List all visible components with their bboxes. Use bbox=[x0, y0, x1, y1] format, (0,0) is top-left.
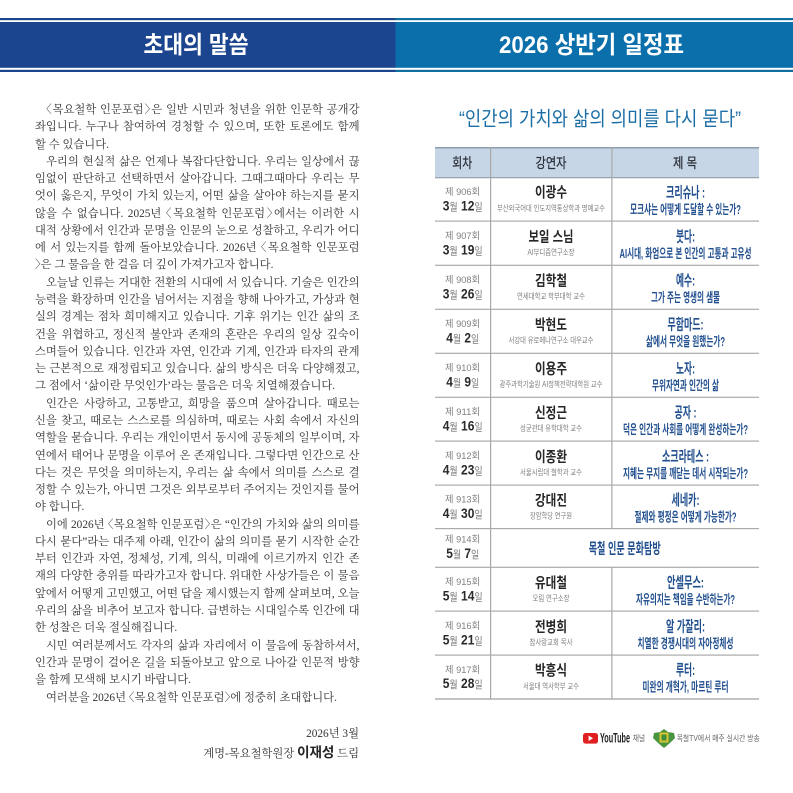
paragraph 5: 한 성찰은 더욱 절실해집니다. bbox=[35, 622, 177, 634]
row: 916: 제 916회 bbox=[445, 621, 480, 632]
icon: YouTube play button bbox=[583, 733, 598, 744]
row: 917: 박흥식 bbox=[535, 663, 567, 680]
row: 916: 전병희 bbox=[535, 619, 567, 636]
row: 910: 이용주 bbox=[535, 361, 567, 378]
footer: YouTube channel: YouTube bbox=[600, 730, 630, 746]
paragraph 3: 스며들어 있습니다. 인간과 자연, 인간과 기계, 인간과 타자의 관계 bbox=[35, 346, 360, 358]
paragraph 1 bbox=[35, 103, 360, 151]
paragraph 1: 〈목요철학 인문포럼〉은 일반 시민과 청년을 위한 인문학 공개강 bbox=[46, 104, 360, 116]
row: 913: 강대진 bbox=[535, 492, 567, 510]
row: 908: 그가 주는 영생의 샘물 bbox=[651, 290, 720, 305]
paragraph 5: 재의 다양한 층위를 따라가고자 합니다. 위대한 사상가들은 이 물음 bbox=[35, 570, 360, 582]
row: 912: 서울시립대 철학과 교수 bbox=[520, 467, 582, 477]
row: 910: 4월 9일 bbox=[446, 374, 479, 390]
row: 908: 예수: bbox=[676, 273, 695, 290]
row: 915: 5월 14일 bbox=[443, 587, 483, 603]
row: 913: 제 913회 bbox=[445, 495, 480, 506]
row: 906: 부산외국어대 인도지역통상학과 명예교수 bbox=[497, 203, 605, 213]
paragraph 2: 에 서 있는지를 함께 돌아보았습니다. 2026년 〈목요철학 인문포럼 bbox=[35, 242, 360, 254]
paragraph 5: 부터 인간과 자연, 정체성, 기계, 의식, 미래에 이르기까지 인간 존 bbox=[35, 553, 360, 565]
row: 911: 4월 16일 bbox=[443, 417, 483, 433]
row: 907: AI부디즘연구소장 bbox=[528, 247, 575, 257]
row: 917 bbox=[443, 662, 728, 695]
paragraph 6 bbox=[35, 639, 360, 686]
right header band: 2026 상반기 일정표: 2026 상반기 일정표 bbox=[499, 32, 684, 59]
row: 909: 제 909회 bbox=[445, 319, 480, 330]
row: 916: 알 가잘리: bbox=[666, 617, 705, 635]
table header row: 제 목 bbox=[673, 155, 697, 171]
paragraph 4 bbox=[35, 397, 360, 513]
row: 914: 5월 7일 bbox=[446, 545, 479, 561]
footer: YouTube channel bbox=[583, 730, 645, 746]
row: 912: 이종환 bbox=[535, 449, 567, 466]
paragraph 3: 건을 위협하고, 정신적 불안과 존재의 혼란은 우리의 일상 깊숙이 bbox=[35, 329, 360, 341]
row: 916: 5월 21일 bbox=[443, 631, 483, 647]
row: 908: 3월 26일 bbox=[443, 286, 483, 302]
row: 913 bbox=[443, 492, 737, 524]
paragraph 4: 신을 찾고, 때로는 스스로를 의심하며, 때로는 사회 속에서 자신의 bbox=[35, 415, 360, 427]
row: 914 bbox=[445, 535, 661, 561]
schedule subtitle: “인간의 가치와 삶의 의미를 다시 묻다” bbox=[459, 108, 741, 130]
row: 910: 제 910회 bbox=[445, 363, 480, 374]
footer: YouTube channel: 채널 bbox=[633, 733, 645, 743]
paragraph 4: 연에서 태어나 문명을 이루어 온 존재입니다. 그렇다면 인간으로 산 bbox=[35, 450, 360, 462]
row: 911: 신정근 bbox=[535, 405, 567, 422]
paragraph 4: 야 합니다. bbox=[35, 501, 84, 513]
row: 916 bbox=[443, 617, 734, 651]
paragraph 2: 엇이 옳은지, 무엇이 가치 있는지, 어떤 삶을 살아야 하는지를 묻지 bbox=[35, 190, 360, 202]
row: 917: 미완의 개혁가, 마르틴 루터 bbox=[642, 680, 728, 695]
footer: Mokcheol TV broadcast note bbox=[653, 729, 760, 748]
row: 906: 크리슈나 : bbox=[666, 184, 705, 201]
paragraph 3 bbox=[35, 276, 360, 392]
paragraph 5: 다시 묻다”라는 대주제 아래, 인간이 삶의 의미를 묻기 시작한 순간 bbox=[35, 536, 360, 548]
row: 915: 안셀무스: bbox=[667, 574, 704, 591]
paragraph 1: 좌입니다. 누구나 참여하여 경청할 수 있으며, 또한 토론에도 함께 bbox=[35, 121, 360, 133]
paragraph 6: 인간과 문명이 걸어온 길을 되돌아보고 앞으로 나아갈 인문적 방향 bbox=[35, 657, 360, 669]
paragraph 2 bbox=[35, 155, 360, 271]
paragraph 4: 역할을 묻습니다. 우리는 개인이면서 동시에 공동체의 일부이며, 자 bbox=[35, 432, 360, 444]
row: 906: 제 906회 bbox=[445, 187, 480, 198]
date line: 2026년 3월 bbox=[306, 728, 359, 740]
row: 911: 성균관대 유학대학 교수 bbox=[520, 423, 582, 433]
row: 908: 연세대학교 학부대학 교수 bbox=[517, 291, 585, 301]
left header band: 초대의 말씀: 초대의 말씀 bbox=[144, 32, 248, 59]
row: 917: 제 917회 bbox=[445, 665, 480, 676]
row: 914: 목철 인문 문화탐방 bbox=[589, 540, 661, 557]
table header row: 회차 bbox=[452, 155, 472, 171]
table header row: 강연자 bbox=[536, 155, 567, 171]
row: 915 bbox=[443, 574, 735, 607]
row: 910 bbox=[445, 361, 719, 393]
row: 912 bbox=[443, 448, 748, 481]
paragraph 2: 우리의 현실적 삶은 언제나 복잡다단합니다. 우리는 일상에서 끊 bbox=[46, 156, 360, 168]
row: 912: 4월 23일 bbox=[443, 461, 483, 477]
paragraph 3: 그 점에서 ‘삶이란 무엇인가’라는 물음은 더욱 치열해졌습니다. bbox=[35, 380, 335, 392]
table header row bbox=[435, 147, 759, 178]
row: 912: 소크라테스 : bbox=[662, 448, 709, 465]
row: 909: 박현도 bbox=[535, 317, 567, 334]
paragraph 4: 인간은 사랑하고, 고통받고, 희망을 품으며 살아갑니다. 때로는 bbox=[46, 398, 360, 410]
row: 915: 오림 연구소장 bbox=[532, 593, 570, 603]
paragraph 5 bbox=[35, 518, 360, 634]
schedule table bbox=[435, 147, 759, 700]
row: 909: 서강대 유로메나연구소 대우교수 bbox=[508, 335, 594, 345]
row: 913: 장암학당 연구원 bbox=[530, 511, 572, 521]
signature: 계명-목요철학원장 이재성 드림 bbox=[203, 744, 359, 760]
row: 909 bbox=[445, 317, 725, 349]
paragraph 7: 여러분을 2026년 〈목요철학 인문포럼〉에 정중히 초대합니다. bbox=[46, 692, 337, 704]
row: 915: 제 915회 bbox=[445, 577, 480, 588]
paragraph 4: 다는 것은 무엇을 의미하는지, 우리는 삶 속에서 의미를 스스로 결 bbox=[35, 467, 360, 479]
paragraph 2: 임없이 판단하고 선택하면서 살아갑니다. 그때그때마다 우리는 무 bbox=[35, 173, 360, 185]
row: 907: 3월 19일 bbox=[443, 242, 483, 258]
row: 907 bbox=[443, 229, 752, 261]
paragraph 5: 우리의 삶을 비추어 보고자 합니다. 급변하는 시대일수록 인간에 대 bbox=[35, 605, 360, 617]
row: 913: 세네카: bbox=[672, 492, 700, 509]
row: 907: 제 907회 bbox=[445, 231, 480, 242]
row: 908: 제 908회 bbox=[445, 275, 480, 286]
row: 909: 무함마드: bbox=[668, 317, 704, 334]
icon: green shield emblem bbox=[653, 729, 675, 748]
row: 910: 무위자연과 인간의 삶 bbox=[652, 378, 719, 393]
paragraph 2: 대적 상황에서 인간과 문명을 인문의 눈으로 성찰하고, 우리가 어디 bbox=[35, 225, 360, 237]
paragraph 4: 정할 수 있는가, 아니면 그것은 외부로부터 주어지는 것인지를 물어 bbox=[35, 484, 360, 496]
row: 913: 4월 30일 bbox=[443, 505, 483, 521]
row: 917: 서울대 역사학부 교수 bbox=[523, 681, 579, 691]
paragraph 1: 할 수 있습니다. bbox=[35, 139, 109, 151]
row: 909: 4월 2일 bbox=[446, 330, 479, 346]
row: 907: 붓다: bbox=[676, 229, 695, 246]
row: 916: 참사랑교회 목사 bbox=[530, 637, 573, 647]
row: 911: 제 911회 bbox=[445, 407, 480, 418]
row: 917: 루터: bbox=[676, 662, 695, 679]
paragraph 3: 오늘날 인류는 거대한 전환의 시대에 서 있습니다. 기술은 인간의 bbox=[46, 277, 360, 289]
row: 908 bbox=[443, 273, 720, 305]
right header band: 2026 상반기 일정표 bbox=[396, 18, 793, 72]
row: 906: 3월 12일 bbox=[443, 197, 483, 213]
paragraph 6: 을 함께 모색해 보시기 바랍니다. bbox=[35, 674, 191, 686]
row: 911: 공자 : bbox=[674, 404, 696, 421]
paragraph 2: 〉은 그 물음을 한 걸음 더 깊이 가져가고자 합니다. bbox=[35, 259, 273, 271]
row: 917: 5월 28일 bbox=[443, 675, 483, 691]
paragraph 3: 실의 경계는 점차 희미해지고 있습니다. 기후 위기는 인간 삶의 조 bbox=[35, 311, 360, 323]
paragraph 6: 시민 여러분께서도 각자의 삶과 자리에서 이 물음에 동참하셔서, bbox=[46, 640, 360, 652]
left header band: 초대의 말씀 bbox=[0, 18, 396, 72]
row: 907: 보일 스님 bbox=[528, 229, 574, 246]
row: 906 bbox=[443, 184, 741, 217]
paragraph 5: 이에 2026년 〈목요철학 인문포럼〉은 “인간의 가치와 삶의 의미를 bbox=[46, 519, 360, 531]
row: 911 bbox=[443, 404, 748, 437]
row: 915: 유대철 bbox=[535, 575, 567, 592]
paragraph 3: 능력을 확장하며 인간을 넘어서는 지점을 향해 나아가고, 가상과 현 bbox=[35, 294, 360, 306]
paragraph 3: 는 근본적으로 재정립되고 있습니다. 삶의 방식은 더욱 다양해졌고, bbox=[35, 363, 360, 375]
footer: Mokcheol TV broadcast note: 목철TV에서 매주 실시간 방송 bbox=[677, 733, 760, 743]
row: 906: 이광수 bbox=[535, 185, 567, 202]
row: 909: 삶에서 무엇을 원했는가? bbox=[646, 334, 725, 349]
row: 914: 제 914회 bbox=[445, 535, 480, 546]
paragraph 5: 앞에서 어떻게 고민했고, 어떤 답을 제시했는지 함께 살펴보며, 오늘 bbox=[35, 588, 360, 600]
row: 912: 제 912회 bbox=[445, 451, 480, 462]
row: 910: 노자: bbox=[676, 361, 695, 378]
row: 908: 김학철 bbox=[535, 273, 567, 290]
paragraph 2: 않을 수 없습니다. 2025년 〈목요철학 인문포럼〉에서는 이러한 시 bbox=[35, 208, 360, 220]
row: 910: 광주과학기술원 AI정책전략대학원 교수 bbox=[500, 379, 602, 389]
